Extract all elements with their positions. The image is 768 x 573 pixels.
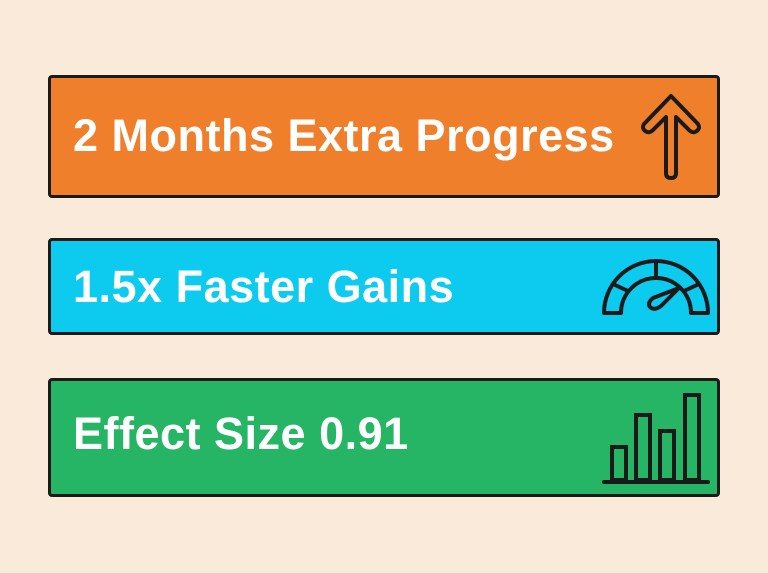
text: 2 Months Extra Progress: 2 Months Extra Progress bbox=[73, 110, 615, 161]
icon: up arrow bbox=[641, 94, 701, 180]
panel: effect size 0.91 bbox=[48, 378, 720, 497]
icon: bar chart bbox=[602, 393, 710, 484]
text: 1.5x Faster Gains: 1.5x Faster Gains bbox=[73, 261, 454, 312]
icon: speedometer gauge bbox=[602, 259, 710, 315]
text: Effect Size 0.91: Effect Size 0.91 bbox=[73, 408, 409, 459]
panel: 2 months extra progress bbox=[48, 75, 720, 198]
panel: 1.5x faster gains bbox=[48, 238, 720, 335]
